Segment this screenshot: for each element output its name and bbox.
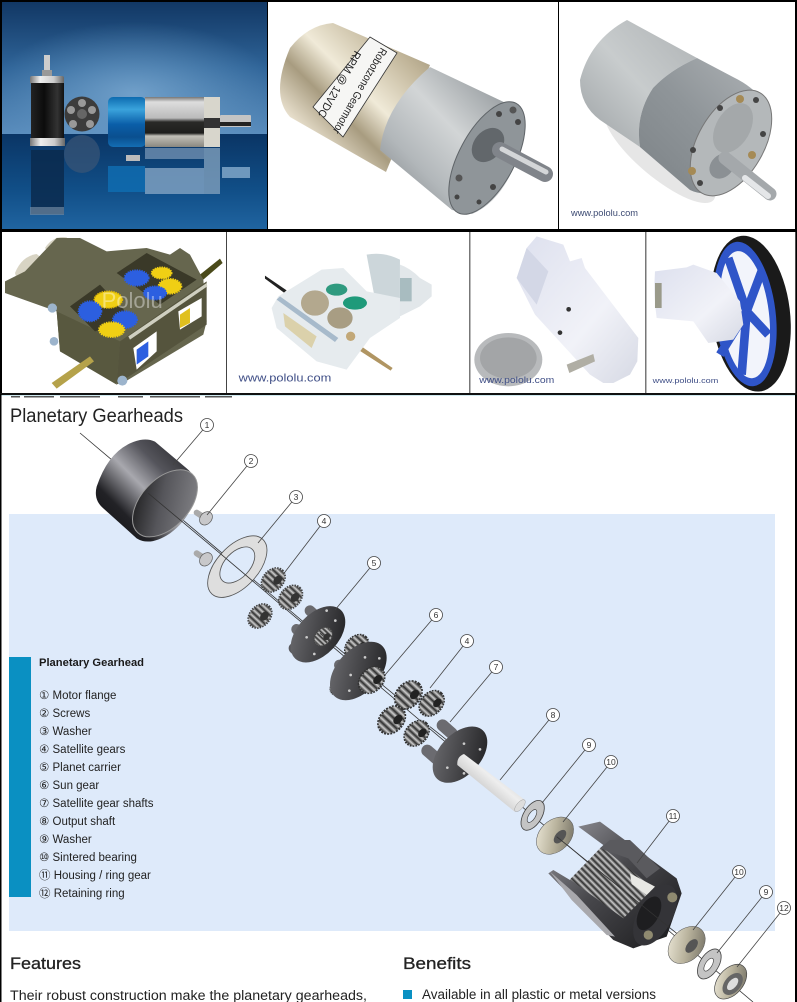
photo: silver gearmotor: www.pololu.com (570, 208, 638, 219)
photo: clear gearbox right end (400, 265, 432, 316)
parts list: ④ Satellite gears (39, 744, 126, 756)
photo: white gearmotor with blue wheel: www.pololu.com (651, 376, 718, 385)
parts list: ⑦ Satellite gear shafts (39, 798, 154, 810)
heading: Benefits: Benefits (403, 954, 471, 973)
parts list: ⑧ Output shaft (39, 816, 116, 828)
numbered callouts: 8 (551, 710, 556, 720)
numbered callouts: 4 (322, 516, 327, 526)
blue side bar (9, 657, 31, 897)
part 5: planet carrier (280, 596, 356, 673)
numbered callouts: 5 (372, 558, 377, 568)
parts list: ⑨ Washer (39, 834, 92, 846)
callout leader lines (173, 425, 784, 967)
photo: olive twin-motor gearbox with blue and yellow gears: Pololu (102, 288, 163, 313)
part 12: retaining ring (708, 958, 753, 1002)
numbered callouts: 2 (249, 456, 254, 466)
parts list: ⑤ Planet carrier (39, 762, 121, 774)
frame lines: second row (0, 232, 797, 1002)
numbered callouts: 1 (205, 420, 210, 430)
photo: Robotzone gearmotor: RPM @ 12VDC (315, 48, 363, 119)
part 6: sun gear (319, 630, 407, 711)
numbered callouts: 9 (764, 887, 769, 897)
numbered callouts: 12 (779, 903, 789, 913)
numbered callouts: 9 (587, 740, 592, 750)
numbered callouts: 10 (734, 867, 744, 877)
numbered callouts (200, 418, 790, 914)
parts list: ③ Washer (39, 726, 92, 738)
part 11: housing and ring gear (548, 822, 686, 953)
parts list: ⑫ Retaining ring (39, 887, 125, 900)
photo: clear twin-motor gearbox (227, 232, 400, 393)
part 8: output shaft (457, 754, 527, 813)
numbered callouts: 10 (606, 757, 616, 767)
photo: clear twin-motor gearbox: www.pololu.com (237, 373, 331, 385)
text: benefits item: Available in all plastic or metal versions (422, 987, 656, 1002)
photo: olive twin-motor gearbox with blue and yellow gears (2, 232, 226, 393)
exploded axis line (80, 433, 753, 1002)
photo: silver gearmotor (559, 2, 796, 229)
heading: Features: Features (10, 954, 81, 973)
photo: Robotzone gearmotor (268, 2, 558, 229)
photo: white right-angle gearmotor with coin (471, 232, 645, 393)
numbered callouts: 11 (669, 811, 678, 821)
parts list: ⑪ Housing / ring gear (39, 869, 151, 882)
parts list: ② Screws (39, 708, 90, 720)
numbered callouts: 7 (494, 662, 499, 672)
part 7: satellite gear shafts (422, 716, 498, 793)
part 9: washer (516, 796, 549, 834)
numbered callouts: 6 (434, 610, 439, 620)
benefit bullet (403, 990, 412, 999)
heading: Planetary Gearheads: Planetary Gearheads (10, 406, 183, 427)
photo: white gearmotor with blue wheel (646, 231, 797, 396)
parts list (39, 657, 154, 900)
numbered callouts: 4 (465, 636, 470, 646)
photo: Robotzone gearmotor: Robotzone Gearmotor (330, 46, 389, 136)
part 4: satellite gears (244, 564, 307, 632)
photo: white right-angle gearmotor with coin: www.pololu.com (478, 375, 555, 385)
part 1: motor flange (96, 439, 220, 553)
parts list: Planetary Gearhead (39, 657, 144, 669)
part 10: sintered bearing (529, 810, 581, 862)
parts list: ⑩ Sintered bearing (39, 852, 137, 864)
light-blue diagram panel (9, 514, 775, 931)
photo: blue studio planetary motors (2, 2, 267, 229)
part 3: washer (197, 525, 307, 627)
parts list: ⑥ Sun gear (39, 780, 99, 792)
clipped heading fragment (11, 396, 232, 398)
part 2: screws (197, 509, 215, 569)
part 10: second sintered bearing (661, 919, 713, 971)
parts list: ① Motor flange (39, 690, 116, 702)
part 9: second washer (693, 945, 726, 983)
part 4: satellite gear cluster (373, 676, 449, 751)
numbered callouts: 3 (294, 492, 299, 502)
